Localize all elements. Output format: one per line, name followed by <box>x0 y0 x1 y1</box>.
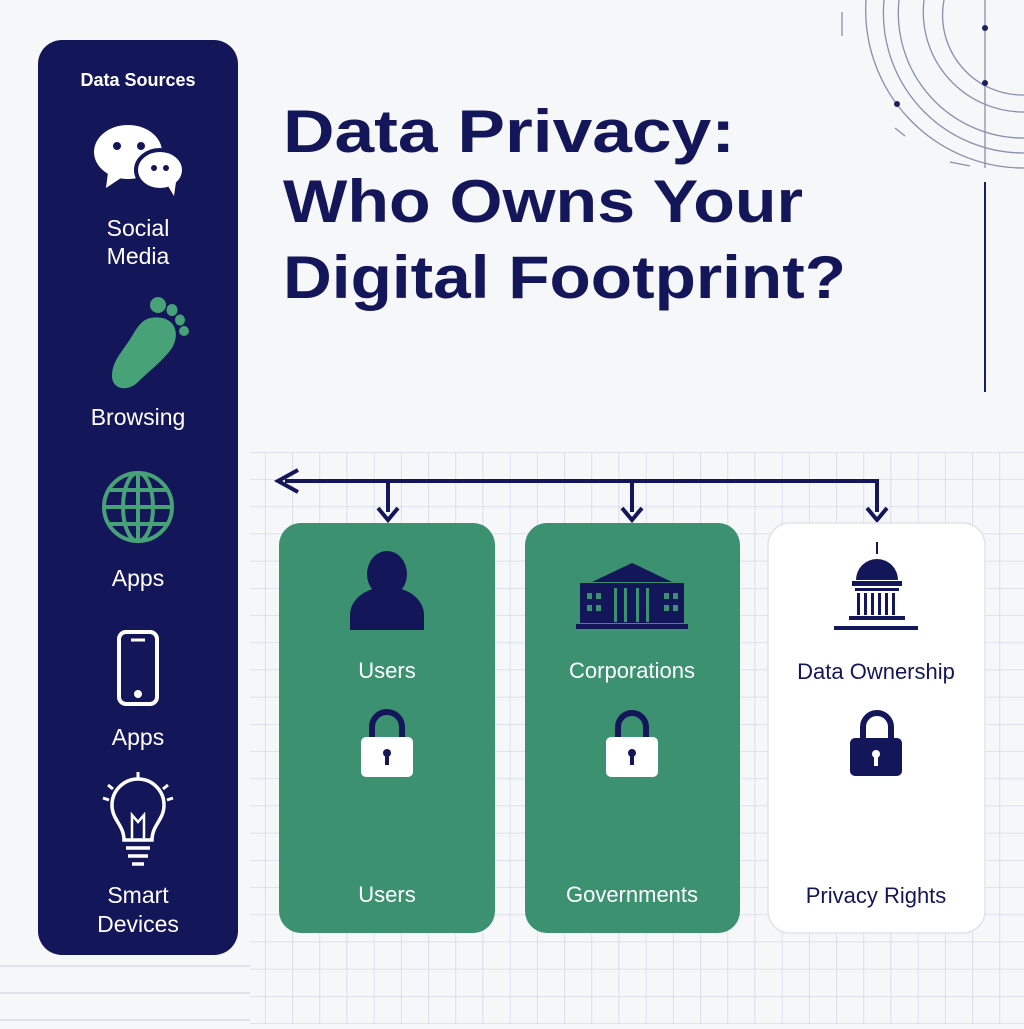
icon: smartphone <box>119 632 157 704</box>
label: privacy rights: Privacy Rights <box>806 883 946 908</box>
icon: building <box>576 563 688 629</box>
label: apps 2: Apps <box>112 724 164 750</box>
icon: lock dark <box>850 713 902 776</box>
title: Digital Footprint? <box>283 244 846 311</box>
panel: data sources: Media <box>107 243 170 269</box>
label: users: Users <box>358 658 416 683</box>
card: users <box>279 523 495 933</box>
title: Data Privacy: <box>283 98 735 165</box>
title <box>283 98 846 311</box>
icon: chat bubbles <box>94 125 184 196</box>
arrow: distribution line <box>278 470 887 520</box>
label: data ownership: Data Ownership <box>797 659 955 684</box>
panel: data sources <box>38 40 238 955</box>
card: data ownership <box>768 523 985 933</box>
icon: globe <box>104 473 172 541</box>
title: Who Owns Your <box>283 168 803 235</box>
label: browsing: Browsing <box>91 404 185 430</box>
panel: data sources: Devices <box>97 911 179 937</box>
label: social media: Social <box>107 215 169 241</box>
icon: lock <box>361 712 413 777</box>
decoration: concentric arcs <box>842 0 1024 392</box>
icon: lock <box>606 713 658 777</box>
label: apps: Apps <box>112 565 164 591</box>
card: corporations <box>525 523 740 933</box>
label: governments: Governments <box>566 882 698 907</box>
icon: lightbulb <box>103 772 173 864</box>
icon: footprint <box>112 297 189 388</box>
icon: person <box>350 551 424 630</box>
label: corporations: Corporations <box>569 658 695 683</box>
label: smart devices: Smart <box>107 882 169 908</box>
heading: data sources: Data Sources <box>80 70 196 90</box>
icon: capitol <box>834 542 918 630</box>
label: users bottom: Users <box>358 882 416 907</box>
